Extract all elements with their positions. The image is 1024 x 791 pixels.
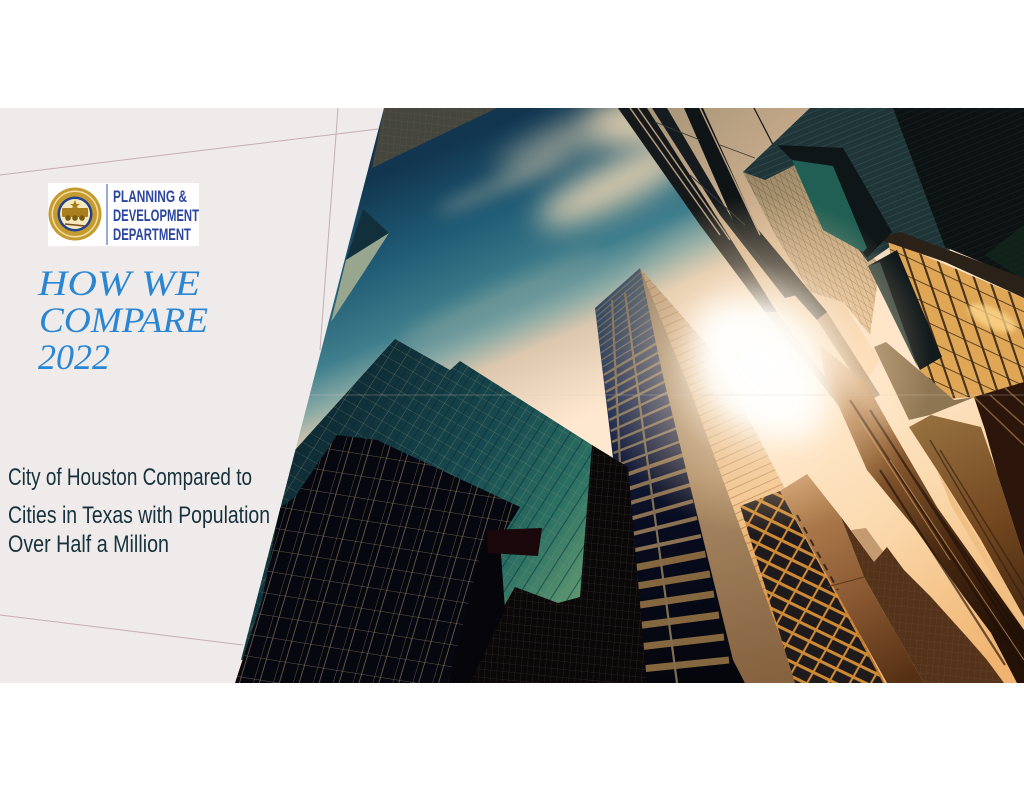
building: diagonal glass band — [617, 108, 880, 410]
building: tower window bands — [596, 268, 797, 683]
photo: skyscrapers seen from below — [235, 84, 1024, 683]
clouds — [404, 108, 680, 341]
window box: upper teal — [777, 145, 892, 258]
subtitle text block: Over Half a Million — [8, 531, 169, 558]
sun glare — [592, 195, 932, 535]
building: distant skyline — [841, 517, 1004, 683]
awning: dark ledge — [487, 528, 542, 556]
building: gold windows right — [875, 232, 1024, 400]
building: left sliver — [331, 209, 389, 322]
thin horizontal seam — [310, 394, 1024, 396]
title: How We Compare 2022: HOW WE — [37, 263, 200, 303]
title: How We Compare 2022 — [37, 263, 208, 377]
building: black foreground block — [235, 435, 520, 683]
title: How We Compare 2022: 2022 — [38, 337, 110, 377]
building: top-right dark block — [893, 108, 1024, 280]
slide: cover — [0, 108, 1024, 683]
building: tower right face — [640, 268, 885, 683]
logo wordmark — [113, 187, 199, 244]
building: tower corner pillar and glass — [595, 268, 745, 683]
logo wordmark: PLANNING & — [113, 187, 187, 206]
building: teal upper block — [743, 108, 950, 262]
building: top-left corner — [372, 108, 497, 168]
panel: light left background — [0, 108, 400, 683]
subtitle text block: City of Houston Compared to — [8, 464, 252, 491]
building: dark right block — [448, 445, 647, 683]
logo: Planning & Development Department — [48, 183, 199, 246]
building: right brown silhouette and dark block — [874, 342, 1024, 630]
building: brown wall — [780, 474, 924, 683]
icon: city of Houston seal — [48, 188, 102, 240]
sky — [235, 108, 1024, 683]
subtitle text block: Cities in Texas with Population — [8, 502, 270, 529]
logo wordmark: DEPARTMENT — [113, 225, 191, 244]
divider — [106, 184, 108, 245]
window box: lower dark — [868, 250, 942, 370]
subtitle text block — [8, 464, 270, 558]
building: green glass tower — [240, 339, 592, 660]
decorative frame lines — [0, 108, 378, 645]
building: lower orange window block — [740, 491, 883, 683]
title: How We Compare 2022: COMPARE — [39, 300, 208, 340]
building: lower diagonal band — [820, 345, 1024, 683]
logo wordmark: DEVELOPMENT — [113, 206, 199, 225]
building: gold grid facade — [743, 165, 880, 335]
